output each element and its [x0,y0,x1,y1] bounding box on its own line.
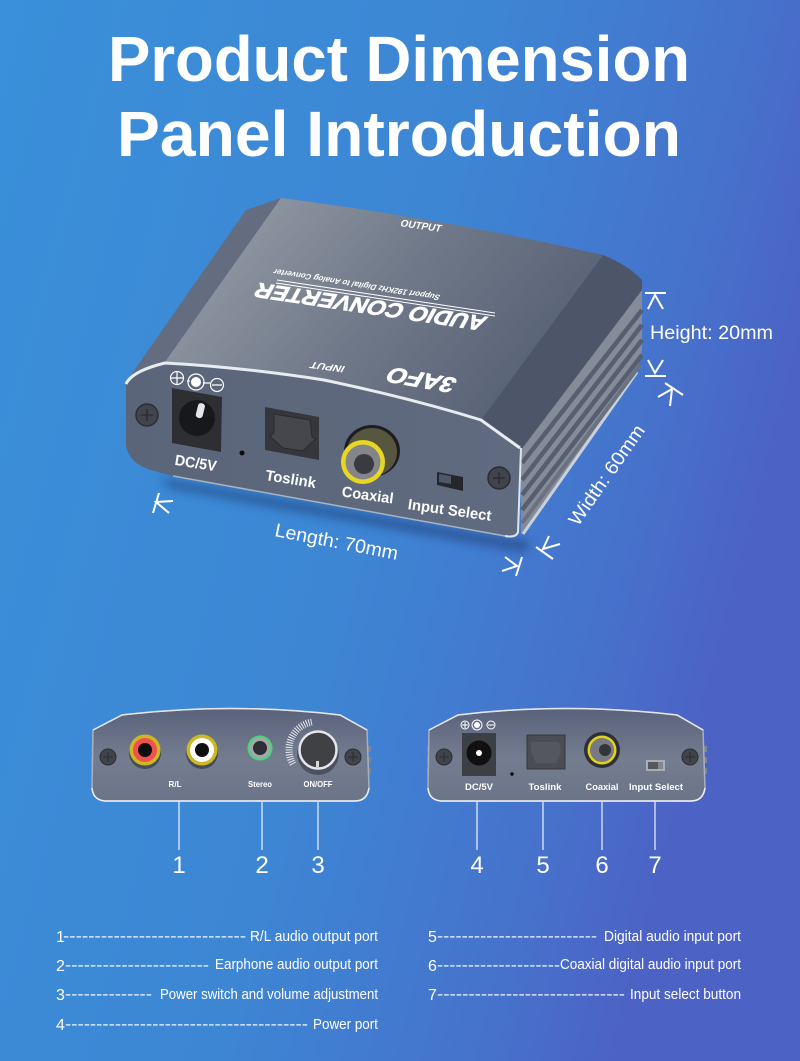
legend: left column: Earphone audio output port [215,957,378,973]
ribbed side [521,290,642,534]
main product: audio converter [126,198,642,552]
output panel [91,708,371,801]
stereo jack [248,736,272,760]
callout lines and numbers: 1 [172,852,186,879]
input panel: Toslink [528,782,562,793]
legend: right column: Input select button [630,987,741,1003]
legend: left column: 2 [56,958,65,975]
legend: left column: 4 [56,1017,65,1034]
right chamfer [481,255,642,455]
DC port [461,720,496,776]
dimension: length: Length: 70mm [273,520,400,565]
input panel: Input Select [629,782,684,793]
input select switch: Input Select [407,496,492,525]
dimension: length [153,493,522,576]
callout lines and numbers [172,802,662,879]
callout lines and numbers: 6 [595,852,609,879]
legend: left column: R/L audio output port [250,929,378,945]
indicator hole [240,450,244,456]
title: Product Dimension [108,23,690,95]
legend: right column: 6 [428,958,437,975]
callout lines and numbers: 5 [536,852,550,879]
legend: left column: Power port [313,1017,378,1033]
callout lines and numbers: 2 [255,852,269,879]
input select switch [646,760,665,771]
screws [100,749,361,765]
legend: left column [56,929,378,1034]
callout lines and numbers: 3 [311,852,325,879]
Toslink port [264,407,319,492]
dimension: height: Height: 20mm [650,323,773,344]
legend: right column: ------------------------------ [437,987,625,1003]
top face printing: 3AFO [381,363,461,398]
volume knob [289,722,339,775]
screws [436,749,698,765]
Coaxial port [341,425,400,508]
output panel: Stereo [248,779,272,789]
legend: right column: -------------------------- [437,929,597,945]
title: Panel Introduction [117,98,681,170]
legend: right column: Digital audio input port [604,929,741,945]
red RCA jack [129,734,161,769]
top face printing [249,219,495,398]
dimension: width [536,383,683,559]
input panel [427,708,707,801]
legend: right column [428,929,741,1004]
top face [165,198,603,420]
legend: left column: 3 [56,987,65,1004]
Toslink port [527,735,565,769]
input panel: Coaxial [586,782,618,793]
legend: left column: ----------------------------- [63,929,246,945]
input select switch [407,472,492,525]
legend: right column: 7 [428,987,437,1004]
top face printing: INPUT [308,359,347,374]
title [108,23,690,170]
legend: right column: Coaxial digital audio input port [560,957,741,973]
white RCA jack [186,734,218,769]
legend: right column: -------------------- [437,958,560,974]
DC port [170,372,224,475]
dimension: width: Width: 60mm [565,421,650,530]
DC port: DC/5V [174,452,218,475]
Toslink port: Toslink [264,467,318,492]
output panel: R/L [168,779,182,789]
legend: left column: 1 [56,929,65,946]
top face printing: Support 192KHz Digital to Analog Converter [271,267,442,301]
callout lines and numbers: 7 [648,852,662,879]
screws [136,404,510,489]
legend: left column: --------------------------------------- [65,1017,308,1033]
top face printing: OUTPUT [399,219,444,235]
front face [126,362,521,536]
legend: left column: Power switch and volume adjustment [160,987,378,1003]
Coaxial port [584,732,620,768]
output panel: ON/OFF [304,779,332,789]
left chamfer [126,198,281,382]
legend: left column: -------------- [65,987,152,1003]
Coaxial port: Coaxial [341,484,395,508]
dimension: height [645,293,773,376]
legend: left column: ----------------------- [65,958,209,974]
legend: right column: 5 [428,929,437,946]
top face printing: AUDIO CONVERTER [249,278,491,335]
input panel: DC/5V [465,782,494,793]
callout lines and numbers: 4 [470,852,484,879]
